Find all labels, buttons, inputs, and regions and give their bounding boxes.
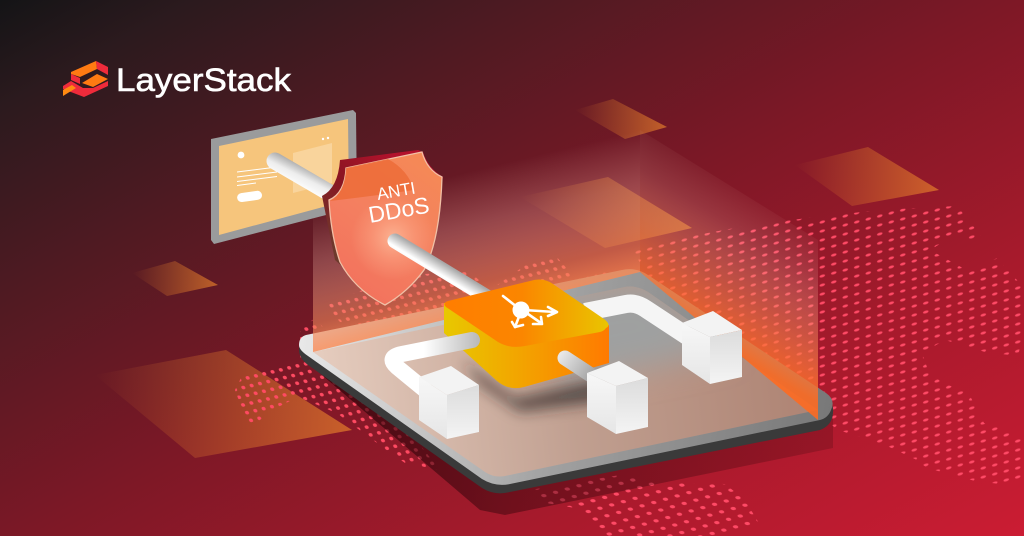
screen pale panel <box>293 143 332 193</box>
shield text: DDoS <box>366 192 431 228</box>
monitor screen <box>219 119 349 235</box>
shield back <box>322 150 443 300</box>
platform top rim <box>299 269 833 485</box>
anti-DDoS shield <box>322 150 443 305</box>
pipe: chip to left server <box>393 340 472 390</box>
isometric floor tiles <box>95 99 939 458</box>
logo mark <box>63 61 108 97</box>
platform shadow <box>302 358 833 515</box>
monitor <box>211 110 357 244</box>
logo <box>63 61 292 98</box>
shield glow rings <box>351 196 435 280</box>
platform surface grey centre <box>548 286 688 386</box>
dotted world map <box>235 206 1024 536</box>
block sides <box>444 303 609 388</box>
block top face <box>444 280 609 347</box>
pipe: monitor to shield <box>275 161 335 196</box>
pipe: shield to router <box>395 241 492 300</box>
platform <box>299 269 833 493</box>
pipe: chip to centre server <box>565 358 594 377</box>
shield text: ANTI <box>375 179 417 204</box>
chip shadow <box>462 360 605 412</box>
logo wordmark: LayerStack <box>116 62 292 98</box>
pipe: chip to right server <box>585 304 690 338</box>
screen content <box>237 137 329 203</box>
server cube centre <box>587 361 648 434</box>
shield face <box>329 152 442 305</box>
central orange router block <box>444 280 609 388</box>
icon: network routing <box>503 296 557 327</box>
platform surface <box>313 287 818 476</box>
platform base rim <box>299 271 833 493</box>
monitor frame <box>211 110 357 244</box>
server cube right <box>682 311 742 384</box>
shield upper highlight <box>330 159 414 201</box>
transparent box walls <box>313 130 818 420</box>
server cube left <box>419 366 479 439</box>
